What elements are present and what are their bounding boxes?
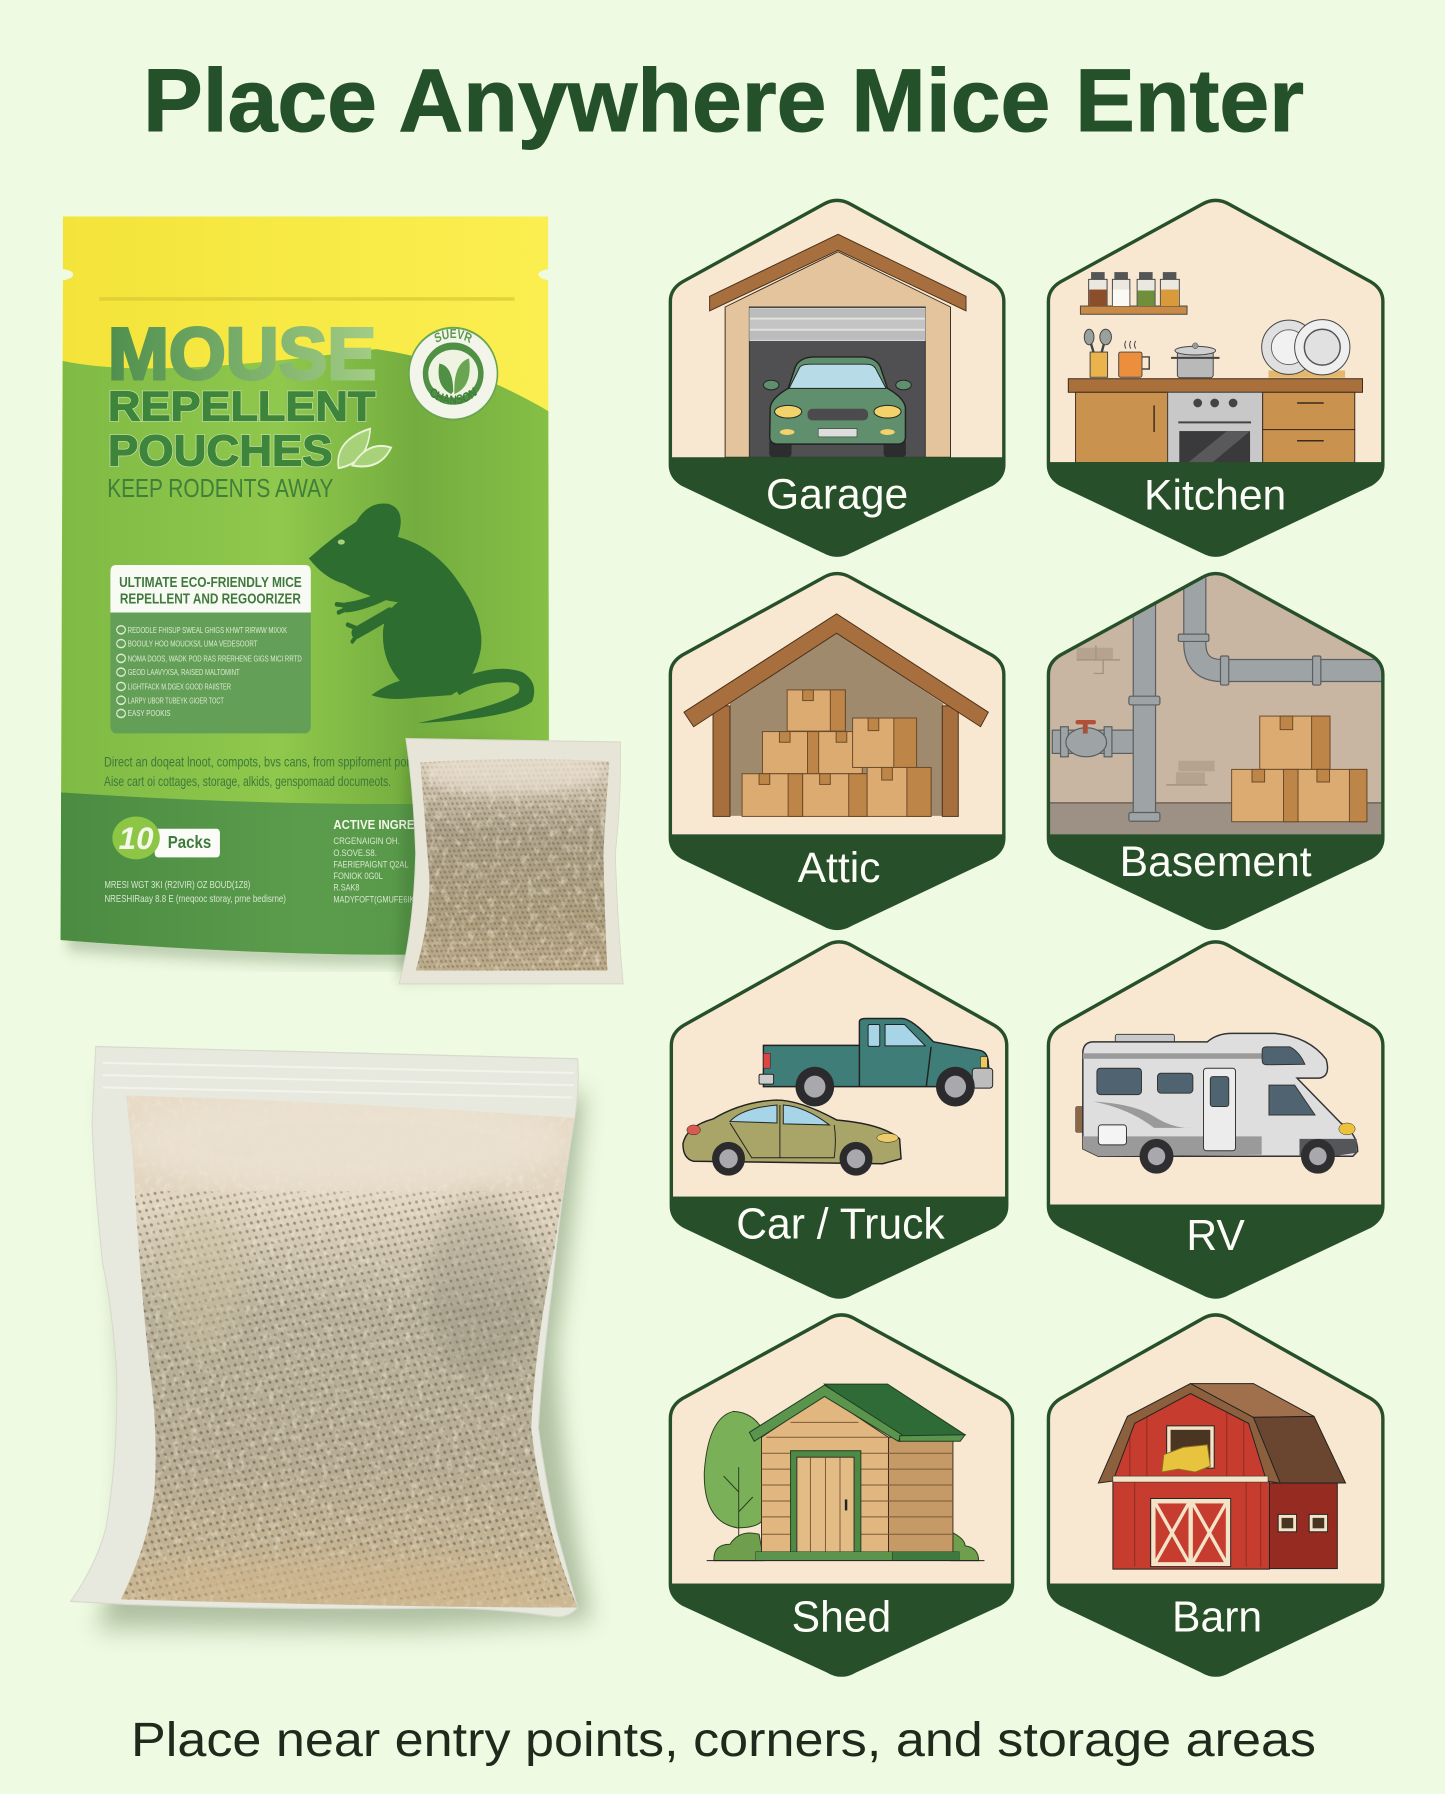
package heading: KEEP RODENTS AWAY (107, 474, 333, 503)
icon: pickup truck (759, 1018, 993, 1107)
net weight text: NRESHIRaay 8.8 E (rneqooc storay, prne bedisrne) (104, 893, 286, 904)
small pouch (399, 738, 623, 984)
title: Place Anywhere Mice Enter (143, 50, 1304, 150)
active ingredients: O.SOVE.S8. (333, 848, 377, 858)
hexagon icons: upper rows (650, 200, 1396, 941)
label: RV (1186, 1211, 1245, 1260)
label: Basement (1120, 838, 1312, 886)
badge: 10 packs: Packs (168, 834, 211, 853)
label: Kitchen (1144, 472, 1286, 520)
panel: barn (1038, 1315, 1396, 1693)
panel: garage (668, 198, 1006, 557)
hexagon icons: lower rows (650, 942, 1396, 1693)
feature box: LARPY UBOR TUBEYK GIOER TOCT (128, 695, 224, 705)
feature box: REDODLE FHISUP SWEAL GHIGS KHWT RIRWW MIXXK (128, 625, 288, 635)
badge: 10 packs (112, 817, 220, 859)
icon: leaves (338, 429, 391, 468)
icon: camper van (1076, 1033, 1358, 1174)
feature box: EASY POOKIS (128, 708, 170, 718)
active ingredients (333, 819, 415, 905)
icon: basement pipes and boxes (1043, 573, 1392, 837)
large pouch (71, 1047, 592, 1630)
label: Barn (1172, 1593, 1262, 1641)
package heading: REPELLENT (108, 383, 375, 430)
panel: kitchen (1046, 198, 1385, 557)
icon: garage and car (710, 234, 966, 457)
feature box: REPELLENT AND REGOORIZER (120, 590, 301, 607)
icon: shed with tree (704, 1384, 984, 1561)
feature box: GEOD LAAVYXSA, RAISED MALTOMINT (128, 667, 240, 677)
package description: Aise cart oi cottages, storage, alkids, genspomaad documeots. (104, 774, 391, 789)
active ingredients: R.SAK8 (333, 883, 360, 893)
panel: basement (1038, 573, 1396, 941)
feature box: ULTIMATE ECO-FRIENDLY MICE (119, 574, 302, 590)
icon: red barn (1098, 1384, 1346, 1569)
active ingredients: ACTIVE INGRE (333, 819, 415, 832)
icon: kitchen (1068, 272, 1363, 463)
label: Shed (792, 1593, 891, 1641)
active ingredients: CRGENAIGIN OH. (333, 836, 400, 846)
footer caption: Place near entry points, corners, and storage areas (131, 1714, 1316, 1767)
package heading (107, 313, 376, 503)
badge: 10 packs: 10 (119, 820, 154, 856)
badge: SUEVR (434, 329, 472, 343)
package heading: MOUSE (108, 313, 376, 394)
feature box (110, 565, 311, 733)
panel: car and truck (670, 940, 1008, 1299)
icon: attic boxes (684, 614, 988, 816)
product package (60, 216, 624, 986)
feature box: LIGHTFACK M.DGEX GOOD RAIISTER (128, 682, 231, 692)
icon: sedan car (683, 1100, 901, 1176)
net weight text: MRESI WGT 3KI (R2IVIR) OZ BOUD(1Z8) (104, 879, 250, 890)
label: Car / Truck (736, 1200, 945, 1248)
feature box: BOOULY HOO MOUCKS/L UMA VEDESOORT (128, 639, 258, 649)
active ingredients: MADYFOFT(GMUFE6IK (333, 895, 415, 905)
package heading: POUCHES (108, 428, 333, 476)
package heading: POUCHES (108, 428, 333, 476)
active ingredients: FAERIEPAIGNT Q2AL (333, 860, 409, 870)
package description: Direct an doqeat lnoot, compots, bvs cans, from sppifoment pon (104, 754, 413, 770)
panel: attic (668, 572, 1006, 930)
net weight text (104, 879, 286, 904)
label: Attic (798, 844, 881, 892)
feature box: NOMA DOOS, WADK POD RAS RRERHENE GIGS MICI RRTD (128, 654, 302, 664)
package description (104, 754, 413, 789)
badge: CHANSON (430, 387, 477, 404)
panel: shed (668, 1313, 1014, 1677)
active ingredients: FONIOK 0G0L (333, 871, 383, 881)
panel: RV (1038, 942, 1396, 1314)
badge (408, 326, 498, 420)
label: Garage (766, 471, 908, 519)
mouse silhouette (309, 503, 534, 723)
package heading: REPELLENT (108, 383, 375, 430)
